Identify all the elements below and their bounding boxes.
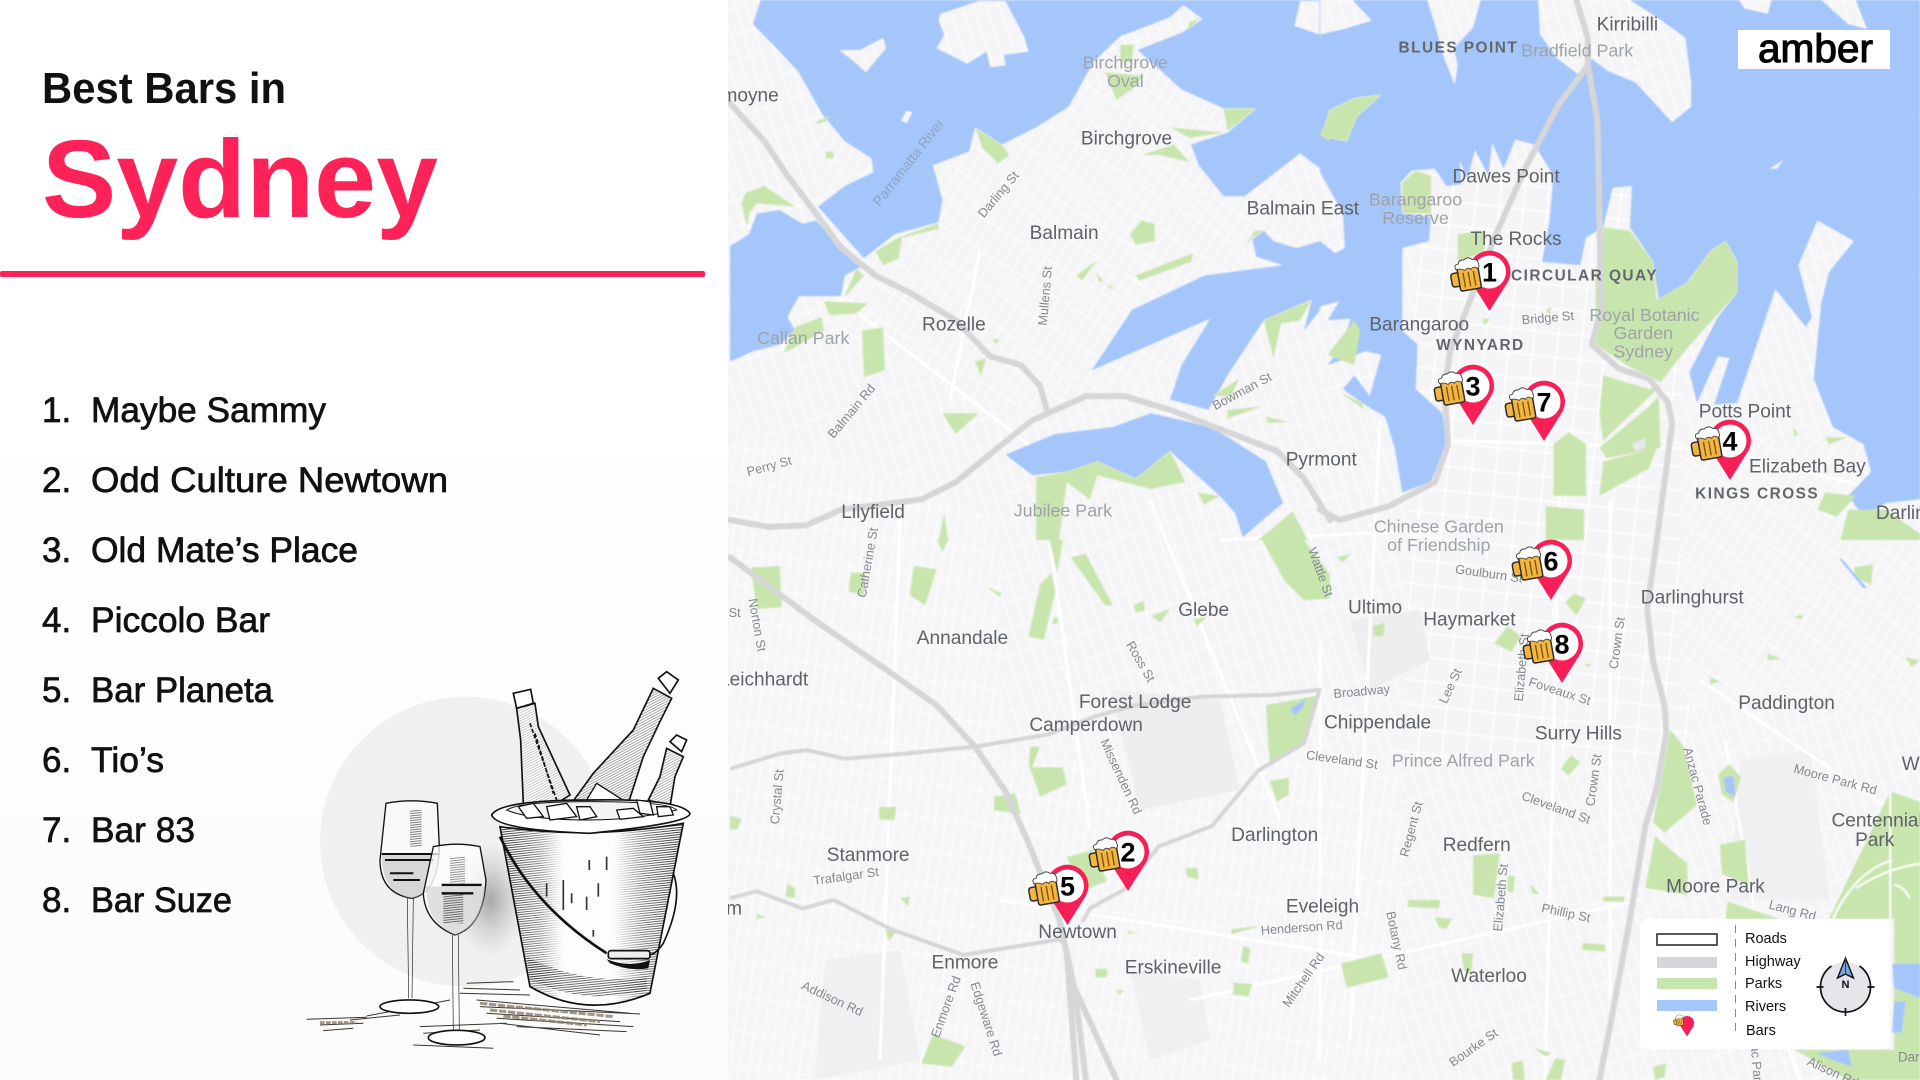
title: Best Bars in: Best Bars in [42,64,286,113]
place labels: Haymarket [1423,610,1516,631]
place labels: Dawes Point [1453,166,1560,187]
place labels: Cleveland St [1520,788,1593,827]
pin 8: 8 [1554,630,1570,660]
place labels: Park [1855,830,1895,851]
place labels: Surry Hills [1535,724,1622,745]
place labels: Lee St [1436,666,1465,706]
place labels: Drummoyne [675,86,779,107]
pin 4 [1689,420,1751,480]
pin 6: 6 [1543,546,1559,576]
place labels: Lang Rd [1767,897,1818,924]
place labels: Bradfield Park [1521,40,1633,60]
place labels: Callan Park [757,328,849,348]
legend: Roads [1745,931,1787,947]
item 5: Bar Planeta [91,671,274,710]
place labels: Eveleigh [1286,896,1359,917]
place labels: Newtown [1038,922,1117,943]
item 6 [42,741,164,780]
place labels: Enmore [931,953,998,974]
pin 5: 5 [1060,872,1075,902]
place labels: Bowman St [1210,369,1274,413]
pin 7: 7 [1536,388,1552,418]
item 5: 5. [42,671,71,710]
place labels: Balmain East [1247,198,1360,219]
place labels: Potts Point [1699,402,1792,423]
legend [1640,919,1890,1049]
pin 6 [1510,540,1572,600]
place labels: Darlinghurst [1641,588,1744,609]
place labels: Erskineville [1125,957,1221,978]
place labels: Garden [1613,323,1673,343]
place labels: Foveaux St [1527,674,1593,708]
place labels: Kirribilli [1597,15,1658,36]
place labels: Edgeware Rd [968,980,1006,1058]
place labels: Goulburn St [1454,561,1524,586]
place labels: Regent St [1396,799,1426,858]
pin 5 [1026,865,1088,925]
place labels: Elizabeth St [1490,863,1511,932]
map [650,0,1920,1080]
place labels: Stanmore [827,845,910,866]
place labels: Elizabeth Bay [1749,457,1866,478]
place labels: Ultimo [1348,597,1402,618]
item 2: Odd Culture Newtown [91,461,448,500]
table shading scribbles [307,982,640,1048]
item 1: Maybe Sammy [91,391,326,430]
place labels: Ross St [1123,638,1159,685]
place labels: Forest Lodge [1079,692,1191,713]
pin 4: 4 [1722,426,1738,456]
place labels: Petersham [650,899,742,920]
place labels: Missenden Rd [1097,736,1145,817]
place labels: Trafalgar St [812,864,880,888]
highways [730,0,1672,1080]
place labels: Crown St [1582,753,1605,807]
place labels: Chinese Garden [1374,517,1504,537]
soft shadow [453,843,527,957]
place labels: Norton St [745,597,770,653]
place labels: Catherine St [854,526,881,599]
place labels: Paddington [1738,693,1835,714]
bottle small [648,735,687,807]
place labels: Mullens St [1035,265,1055,326]
place labels: Darling St [975,168,1022,220]
place labels: St [729,605,741,620]
place labels: Mitchell Rd [1279,950,1327,1010]
item 7: 7. [42,811,71,850]
place labels: Bridge St [1521,308,1575,327]
place labels: Prince Alfred Park [1392,751,1535,771]
place labels: Birchgrove [1081,128,1172,149]
backdrop circle [320,697,610,987]
place labels: The Rocks [1470,229,1562,250]
logo: amber: amber [1758,27,1873,71]
place labels: Sydney [1613,342,1673,362]
place labels: Waterloo [1451,966,1527,987]
item 6: 6. [42,741,71,780]
legend: Bars [1746,1023,1776,1039]
item 3: 3. [42,531,71,570]
place labels: Bourke St [1446,1025,1501,1069]
place labels: of Friendship [1387,535,1490,555]
place labels: KINGS CROSS [1695,485,1819,502]
left panel background [0,0,728,1080]
pin 1 [1448,251,1510,311]
place labels: Barangaroo [1369,190,1462,210]
place labels: Birchgrove [1083,53,1168,73]
legend: Highway [1745,954,1801,970]
illustration: champagne bucket and glasses [307,672,690,1048]
place labels: Lilyfield [841,502,905,523]
place labels: Barangaroo [1369,315,1469,336]
item 4: 4. [42,601,71,640]
legend: Parks [1745,976,1782,992]
place labels: Jubilee Park [1014,501,1112,521]
item 7: Bar 83 [91,811,195,850]
place labels: Pyrmont [1286,449,1357,470]
place labels: Glebe [1178,600,1229,621]
place labels: Balmain Rd [824,381,878,441]
place labels: Enmore Rd [928,974,964,1039]
item 3: Old Mate’s Place [91,531,358,570]
place labels: Wattle St [1305,545,1337,599]
pin 3: 3 [1465,372,1481,402]
place labels: Camperdown [1029,715,1143,736]
pin 3 [1432,365,1494,425]
place labels: Addison Rd [800,978,865,1019]
title: Sydney: Sydney [42,118,438,241]
place labels: Parramatta River [869,115,948,209]
place labels: W [1902,754,1920,775]
pin 2: 2 [1120,838,1136,868]
item 1: 1. [42,391,71,430]
place labels: Cleveland St [1305,747,1379,772]
bottle large [572,672,678,817]
wine glass back [380,801,439,1013]
parks [730,17,1920,1080]
place labels: CIRCULAR QUAY [1511,267,1658,284]
water: harbour and bays [730,0,1920,716]
compass [1816,958,1874,1016]
item 6: Tio’s [91,741,164,780]
place labels: Henderson Rd [1260,917,1343,938]
wine glass front [423,844,486,1045]
place labels: Perry St [745,453,794,479]
compass: N [1842,979,1850,991]
list of bars [42,391,448,920]
place labels: Elizabeth St [1511,632,1532,702]
red divider [0,271,705,277]
place labels: Redfern [1443,835,1511,856]
place labels: BLUES POINT [1399,40,1518,57]
place labels: Botany Rd [1383,910,1410,971]
legend bar marker [1673,1014,1694,1037]
place labels: Leichhardt [719,670,809,691]
place labels: Oval [1107,71,1144,91]
pin 8 [1521,623,1583,683]
place labels: Annandale [917,628,1008,649]
place labels: Moore Park [1666,877,1765,898]
item 4: Piccolo Bar [91,601,270,640]
place labels: Crown St [1606,616,1628,670]
pin 7 [1503,381,1565,441]
place labels: WYNYARD [1436,337,1525,354]
place labels: Balmain [1030,223,1099,244]
item 2: 2. [42,461,71,500]
place labels: Phillip St [1540,900,1592,925]
pin 1: 1 [1482,258,1497,288]
ice bucket [492,800,690,1005]
pin 2 [1087,831,1149,891]
item 8: Bar Suze [91,881,232,920]
legend: Rivers [1745,999,1786,1015]
place labels: Darlington [1231,825,1318,846]
place labels: Crystal St [767,768,787,825]
bottle left [513,689,570,810]
item 7 [42,811,195,850]
place labels [650,15,1920,1080]
place labels: Moore Park Rd [1792,761,1879,797]
place labels: Broadway [1333,681,1391,701]
place labels: Anzac Parade [1680,746,1716,827]
land base with street texture [720,0,1920,1080]
left panel lower tint [0,380,728,1080]
item 8: 8. [42,881,71,920]
place labels: Royal Botanic [1589,305,1700,325]
place labels: Chippendale [1324,713,1431,734]
place labels: Rozelle [922,315,986,336]
place labels: Reserve [1382,208,1449,228]
